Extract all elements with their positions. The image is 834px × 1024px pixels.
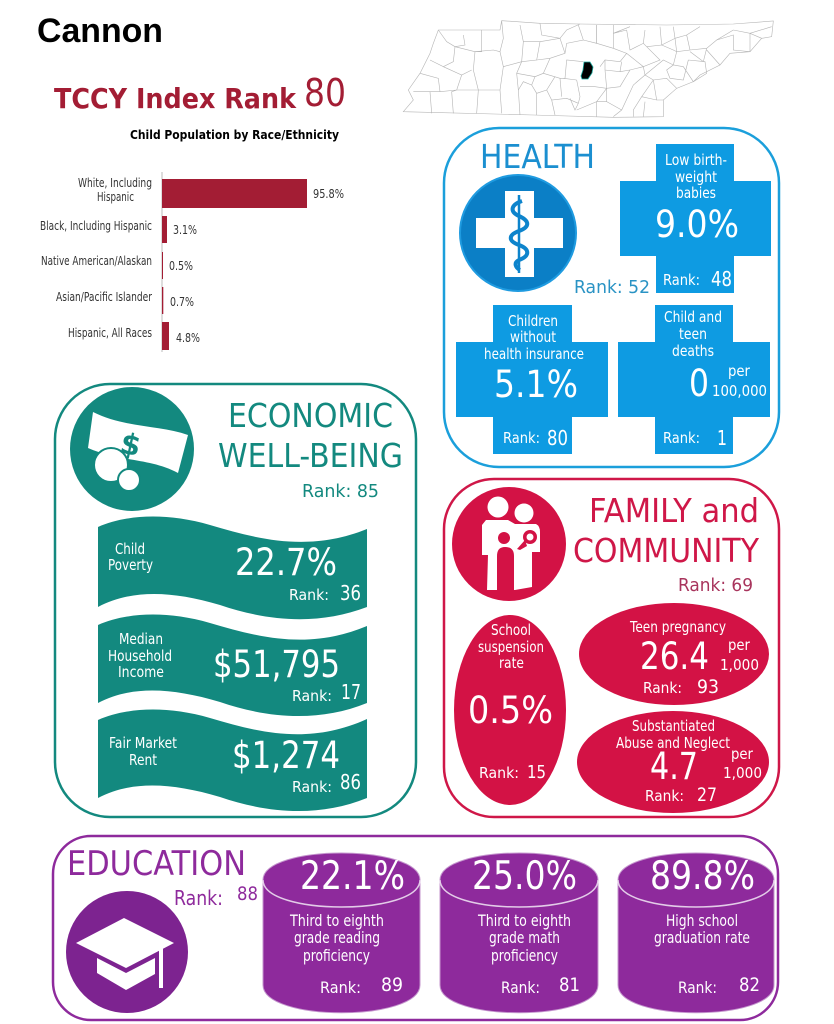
wave: fair market rent: Fair Market bbox=[109, 734, 177, 752]
ellipse: teen pregnancy: 26.4 bbox=[640, 635, 709, 678]
cross: without insurance: health insurance bbox=[484, 345, 584, 363]
cylinder: math proficiency: Third to eighth bbox=[477, 911, 571, 930]
ellipse: abuse and neglect: per bbox=[731, 745, 754, 763]
ellipse: school suspension: suspension bbox=[478, 638, 544, 656]
ellipse: school suspension: Rank: bbox=[479, 764, 519, 782]
ellipse: school suspension bbox=[454, 615, 566, 805]
cylinder: reading proficiency: proficiency bbox=[303, 946, 370, 965]
cross: child and teen deaths: per bbox=[728, 362, 751, 380]
ellipse: school suspension: rate bbox=[499, 654, 524, 672]
map of Tennessee counties bbox=[403, 21, 773, 117]
ellipse: teen pregnancy bbox=[579, 603, 769, 705]
ellipse: abuse and neglect: Rank: bbox=[645, 787, 684, 805]
wave: child poverty: Rank: bbox=[289, 586, 329, 604]
wave: median household income: Rank: bbox=[292, 687, 332, 705]
wave: fair market rent: Rent bbox=[129, 751, 157, 769]
TCCY index rank heading bbox=[54, 71, 346, 115]
wave: median household income: Median bbox=[119, 630, 163, 648]
ellipse: school suspension: 15 bbox=[527, 762, 546, 783]
bar: white: White, Including bbox=[78, 175, 152, 190]
bar: native american: Native American/Alaskan bbox=[41, 253, 152, 268]
cylinder: graduation rate: 82 bbox=[739, 974, 760, 996]
cylinder: reading proficiency: Rank: bbox=[320, 978, 361, 997]
wave: fair market rent: Rank: bbox=[292, 778, 332, 796]
cross: child and teen deaths: deaths bbox=[672, 342, 714, 360]
cross: child and teen deaths bbox=[618, 305, 770, 454]
cylinder: math proficiency bbox=[440, 853, 598, 1013]
bar: asian bbox=[56, 287, 194, 314]
wave: median household income: 17 bbox=[341, 680, 361, 704]
cylinder: graduation rate: Rank: bbox=[678, 978, 717, 997]
cylinder: reading proficiency: 22.1% bbox=[300, 854, 405, 899]
wave: child poverty: 22.7% bbox=[235, 541, 337, 584]
county name title: Cannon bbox=[37, 12, 163, 50]
cross: child and teen deaths: 1 bbox=[717, 426, 727, 450]
health rank: Rank: 52 bbox=[574, 277, 650, 298]
wave: child poverty: Child bbox=[115, 540, 145, 558]
cylinder: reading proficiency bbox=[263, 853, 420, 1013]
wave: child poverty: Poverty bbox=[108, 556, 153, 574]
wave: fair market rent: 86 bbox=[340, 770, 361, 794]
bar: black bbox=[40, 216, 197, 243]
family rank: Rank: 69 bbox=[678, 575, 753, 596]
cross: low birth-weight: weight bbox=[675, 168, 717, 186]
ellipse: teen pregnancy: 1,000 bbox=[720, 656, 759, 674]
panel: family and community bbox=[444, 479, 779, 817]
icon: family bbox=[452, 487, 566, 601]
wave: median household income: $51,795 bbox=[213, 643, 340, 686]
cross: child and teen deaths: teen bbox=[679, 325, 707, 343]
ellipse: school suspension: School bbox=[491, 621, 531, 639]
bar: asian: 0.7% bbox=[170, 294, 194, 309]
family heading: COMMUNITY bbox=[573, 531, 760, 570]
education heading: 88 bbox=[237, 883, 258, 905]
chart title: Child Population by Race/Ethnicity bbox=[130, 127, 339, 142]
economic heading: ECONOMIC bbox=[228, 396, 393, 435]
ellipse: abuse and neglect: 27 bbox=[697, 784, 717, 806]
wave: median household income: Income bbox=[118, 663, 164, 681]
cylinder: math proficiency: 81 bbox=[559, 974, 580, 996]
ellipse: teen pregnancy: Rank: bbox=[643, 679, 682, 697]
education heading: Rank: bbox=[174, 886, 223, 910]
TCCY index rank heading: TCCY Index Rank bbox=[54, 82, 297, 115]
cylinder: reading proficiency: grade reading bbox=[294, 928, 380, 947]
bar: white: Hispanic bbox=[97, 189, 134, 204]
bar: native american: 0.5% bbox=[169, 258, 193, 273]
cylinder: graduation rate: 89.8% bbox=[650, 854, 755, 899]
ellipse: abuse and neglect: Substantiated bbox=[632, 717, 715, 735]
icon: money bbox=[70, 387, 194, 511]
cross: without insurance bbox=[456, 305, 608, 454]
cross: low birth-weight: 9.0% bbox=[655, 203, 739, 246]
icon: graduation cap bbox=[66, 891, 188, 1013]
cross: low birth-weight: 48 bbox=[711, 267, 732, 291]
health heading: HEALTH bbox=[480, 137, 595, 176]
economic heading: Rank: 85 bbox=[302, 481, 379, 502]
cylinder: math proficiency: proficiency bbox=[491, 946, 558, 965]
cross: low birth-weight: Low birth- bbox=[665, 151, 727, 169]
cross: child and teen deaths: Child and bbox=[664, 308, 722, 326]
cross: without insurance: 5.1% bbox=[494, 363, 578, 406]
education heading: EDUCATION bbox=[67, 844, 246, 884]
cross: low birth-weight bbox=[620, 144, 771, 293]
ellipse: teen pregnancy: Teen pregnancy bbox=[629, 618, 726, 636]
panel: health bbox=[444, 128, 779, 467]
bar: black: Black, Including Hispanic bbox=[40, 218, 152, 233]
ellipse: teen pregnancy: per bbox=[728, 636, 751, 654]
cylinder: math proficiency: Rank: bbox=[501, 978, 540, 997]
bar: hispanic bbox=[68, 322, 200, 350]
ellipse: teen pregnancy: 93 bbox=[697, 676, 719, 698]
cross: without insurance: Children bbox=[508, 312, 558, 330]
cylinder: reading proficiency: Third to eighth bbox=[289, 911, 384, 930]
education heading bbox=[67, 844, 258, 910]
icon: medical cross bbox=[460, 175, 576, 291]
cylinder: math proficiency: grade math bbox=[489, 928, 560, 947]
ellipse: school suspension: 0.5% bbox=[468, 689, 553, 732]
cylinder: graduation rate: High school bbox=[666, 911, 738, 930]
icon: money: $ bbox=[117, 426, 144, 463]
bar: hispanic: 4.8% bbox=[176, 330, 200, 345]
cross: low birth-weight: Rank: bbox=[663, 271, 700, 289]
wave: fair market rent bbox=[98, 710, 367, 811]
cylinder: math proficiency: 25.0% bbox=[472, 854, 577, 899]
cylinder: graduation rate: graduation rate bbox=[654, 928, 750, 947]
wave: median household income: Household bbox=[108, 647, 172, 665]
ellipse: abuse and neglect: 4.7 bbox=[650, 745, 698, 788]
TCCY index rank heading: 80 bbox=[304, 71, 346, 115]
family heading: FAMILY and bbox=[589, 491, 759, 530]
cross: without insurance: without bbox=[510, 328, 556, 346]
bar: black: 3.1% bbox=[173, 222, 197, 237]
bar: asian: Asian/Pacific Islander bbox=[56, 289, 153, 304]
wave: median household income bbox=[98, 615, 367, 716]
bar: native american bbox=[41, 252, 193, 279]
ellipse: abuse and neglect bbox=[577, 711, 769, 813]
cross: child and teen deaths: Rank: bbox=[663, 429, 700, 447]
cross: child and teen deaths: 0 bbox=[689, 362, 709, 405]
wave: child poverty: 36 bbox=[340, 581, 361, 605]
family heading bbox=[573, 491, 760, 570]
panel: economic well-being bbox=[55, 384, 416, 817]
wave: child poverty bbox=[98, 517, 367, 619]
economic heading bbox=[218, 396, 403, 502]
cross: child and teen deaths: 100,000 bbox=[712, 382, 767, 400]
economic heading: WELL-BEING bbox=[218, 436, 403, 475]
bar: white bbox=[78, 175, 344, 208]
cross: without insurance: Rank: bbox=[503, 429, 540, 447]
ellipse: abuse and neglect: Abuse and Neglect bbox=[616, 734, 730, 752]
bar chart: child population by race bbox=[40, 172, 344, 352]
bar: white: 95.8% bbox=[313, 186, 344, 201]
ellipse: abuse and neglect: 1,000 bbox=[723, 764, 762, 782]
cross: low birth-weight: babies bbox=[676, 184, 716, 202]
cylinder: reading proficiency: 89 bbox=[381, 974, 403, 996]
bar: hispanic: Hispanic, All Races bbox=[68, 325, 152, 340]
wave: fair market rent: $1,274 bbox=[232, 734, 340, 777]
cylinder: graduation rate bbox=[618, 853, 774, 1013]
cross: without insurance: 80 bbox=[547, 426, 568, 450]
Cannon county highlight bbox=[581, 62, 593, 79]
panel: education bbox=[53, 836, 778, 1020]
